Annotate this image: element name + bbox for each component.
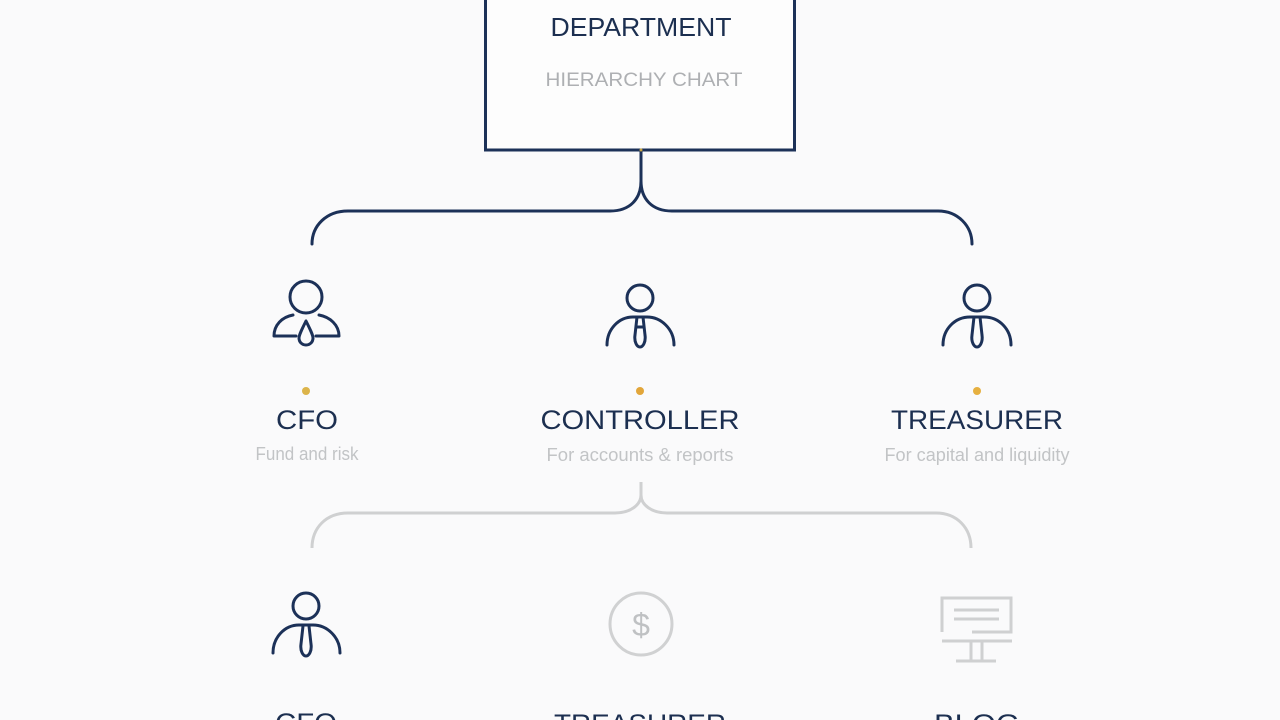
panel: department title box — [486, 0, 794, 150]
connector: navy bracket — [312, 152, 972, 244]
icon: treasurer person — [943, 285, 1011, 347]
icon: controller person — [607, 285, 674, 347]
subheading: hierarchy chart: HIERARCHY CHART — [546, 70, 743, 91]
icon: CFO person — [274, 281, 339, 345]
group: lower treasurer — [554, 593, 726, 720]
group: lower CFO — [273, 593, 340, 720]
heading: department: DEPARTMENT — [550, 12, 732, 42]
marker dot — [636, 387, 644, 395]
group: controller — [540, 285, 740, 465]
description: Fund and risk — [256, 444, 359, 464]
icon: dollar coin — [610, 593, 672, 655]
marker dot — [302, 387, 310, 395]
icon: lower CFO person — [273, 593, 340, 656]
description: For accounts & reports — [546, 445, 734, 465]
group: lower blog — [934, 598, 1020, 720]
marker dot — [973, 387, 981, 395]
description: For capital and liquidity — [884, 445, 1070, 465]
label: CFO: CFO — [276, 405, 338, 435]
icon: dollar coin: $ — [632, 607, 650, 643]
connector dot — [640, 148, 642, 152]
connector: gray bracket — [312, 482, 971, 548]
group: CFO — [256, 281, 359, 464]
label: controller: CONTROLLER — [540, 405, 740, 435]
group: treasurer — [884, 285, 1070, 465]
label: treasurer: TREASURER — [891, 405, 1063, 435]
icon: monitor — [942, 598, 1012, 661]
